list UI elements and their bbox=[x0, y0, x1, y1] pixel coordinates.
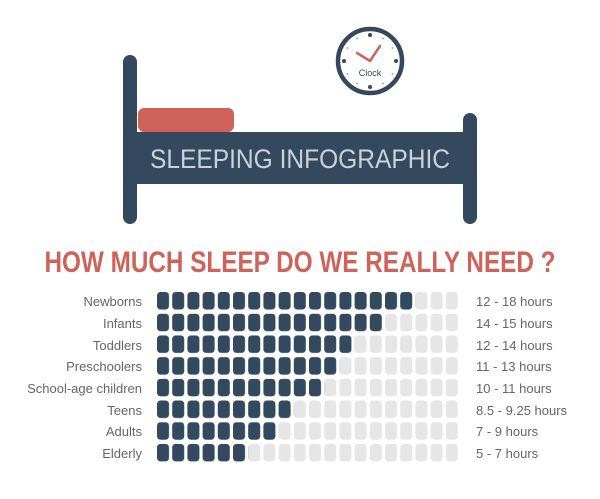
hour values: 8.5 - 9.25 hours bbox=[476, 403, 568, 418]
bed left post bbox=[123, 55, 137, 224]
bed body with title bbox=[130, 132, 470, 184]
hour values: 10 - 11 hours bbox=[476, 381, 552, 396]
row labels: Toddlers bbox=[93, 338, 142, 353]
row labels: Preschoolers bbox=[66, 359, 142, 374]
hour values: 12 - 14 hours bbox=[476, 338, 553, 353]
row labels bbox=[27, 294, 142, 461]
hour values: 7 - 9 hours bbox=[476, 424, 539, 439]
hour values: 11 - 13 hours bbox=[476, 359, 552, 374]
hour values bbox=[476, 294, 568, 461]
bed right post bbox=[463, 113, 477, 224]
row labels: Teens bbox=[107, 403, 142, 418]
icon: clock bbox=[338, 29, 402, 93]
row labels: Newborns bbox=[83, 294, 142, 309]
icon: clock: Clock bbox=[359, 68, 382, 78]
row labels: Elderly bbox=[102, 446, 142, 461]
row labels: Infants bbox=[103, 316, 142, 331]
bar cells bbox=[157, 292, 461, 463]
bed body with title: SLEEPING INFOGRAPHIC bbox=[150, 144, 450, 174]
row labels: Adults bbox=[106, 424, 142, 439]
bed illustration bbox=[123, 55, 477, 224]
hour values: 14 - 15 hours bbox=[476, 316, 553, 331]
hour values: 5 - 7 hours bbox=[476, 446, 539, 461]
row labels: School-age children bbox=[27, 381, 142, 396]
pillow bbox=[138, 108, 234, 132]
hour values: 12 - 18 hours bbox=[476, 294, 553, 309]
chart: sleep needs by age bbox=[27, 292, 568, 463]
